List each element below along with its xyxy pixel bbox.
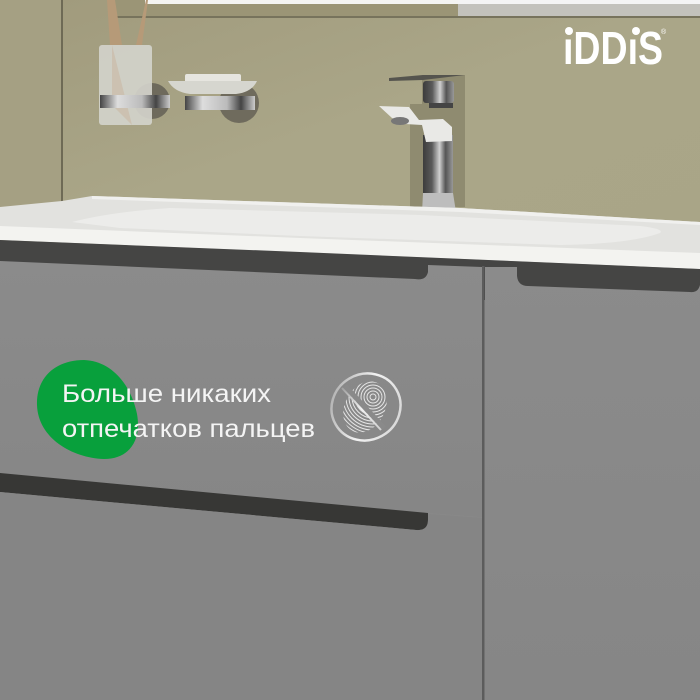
soap dish [168,74,259,123]
faucet [379,75,465,213]
panel: right door [485,267,700,700]
panel: upper drawer [0,261,482,517]
logo: IDDIS: ıDDıS [563,22,663,74]
caption text: отпечатков пальцев [62,415,315,443]
caption text [62,380,315,443]
countertop [0,196,700,269]
mirror edge at top [115,0,700,18]
tumbler holder [99,0,170,125]
wall background [0,0,700,250]
caption text: Больше никаких [62,380,272,408]
panel: lower drawer [0,492,482,700]
dark recess under countertop [0,240,700,300]
logo: IDDIS: ® [661,28,667,36]
door gap [482,266,484,700]
drawer handle recess [0,473,428,530]
green blob [37,360,138,459]
icon: crossed-out fingerprint [330,372,402,442]
